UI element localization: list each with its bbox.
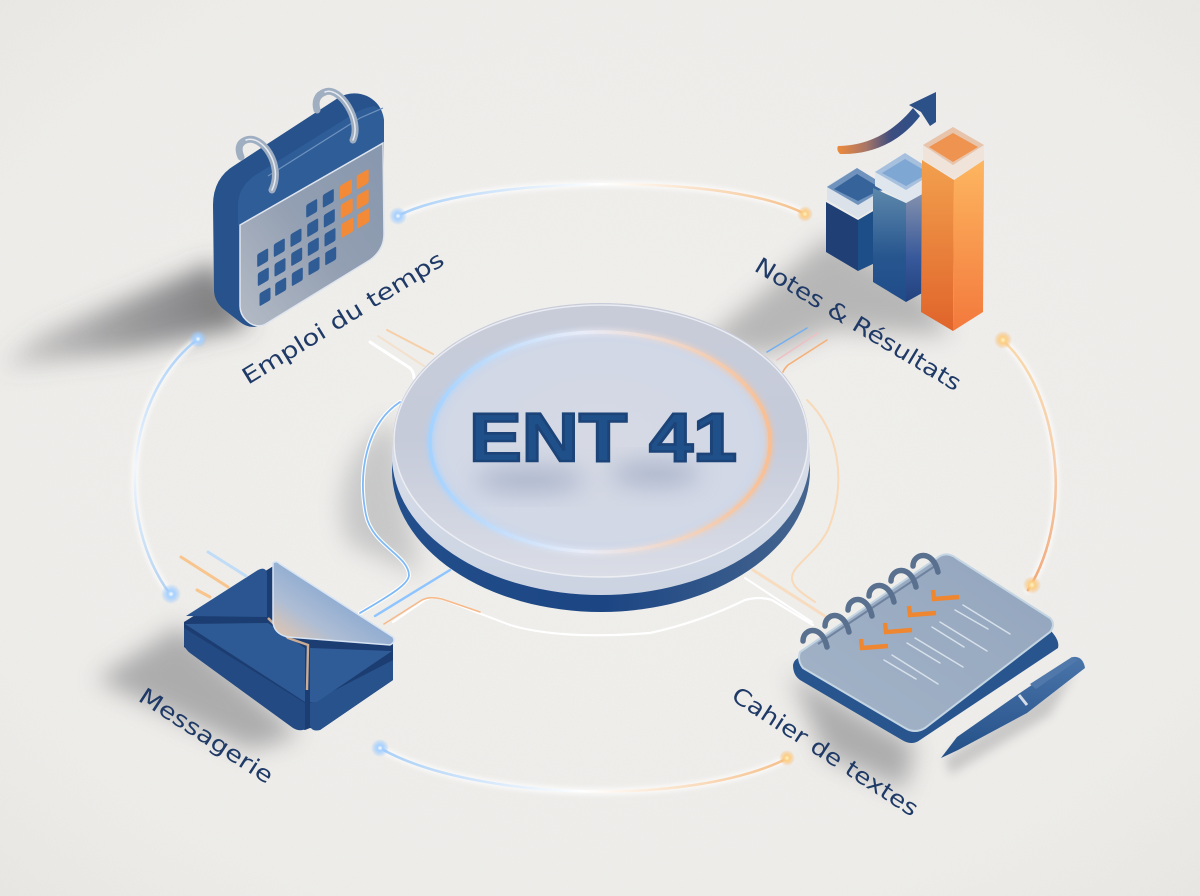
notebook glass page [799,554,1053,731]
envelope glass flap [273,562,394,645]
notebook text lines [884,605,1010,684]
icon: envelope [181,552,394,730]
disc top surface [393,303,809,577]
envelope dark base [184,565,393,730]
arc: bottom [380,748,788,792]
disc navy base [392,328,810,612]
icon: notebook and pen [793,554,1085,758]
calendar header [238,106,384,226]
calendar blue cells [257,189,336,306]
notebook navy cover [793,630,1058,743]
blue bar [873,153,935,302]
pen [941,657,1085,758]
title shadow [475,462,700,492]
cast shadows [0,235,1075,790]
calendar rings [239,91,355,190]
envelope orange glow lines [181,552,246,597]
calendar body [213,93,384,327]
calendar orange cells [340,169,369,238]
orange bar [921,127,984,331]
icon: calendar [213,91,384,327]
notebook spine [818,566,935,644]
outer orbit arcs [135,184,1056,792]
growth arrow [837,92,936,154]
envelope right face [310,648,392,702]
arc: right [1002,340,1056,590]
label: Cahier de textes: Cahier de textes [727,682,923,822]
envelope main left face [185,623,305,702]
disc glass wall [392,317,810,595]
notebook spiral rings [803,555,938,647]
envelope left side [184,628,305,730]
calendar glass panel [240,143,384,326]
icon: bar chart with arrow [826,92,984,331]
label: Notes & Résultats: Notes & Résultats [750,253,966,397]
arc: top [398,184,805,216]
label: Emploi du temps: Emploi du temps [238,247,449,390]
navy bar [826,168,888,271]
arc: left [135,339,198,594]
circuit connectors [360,328,838,635]
central disc [392,303,810,612]
label: Messagerie: Messagerie [134,683,278,789]
arc end dots [161,206,1041,766]
arc halo [135,184,1056,792]
envelope right side [310,660,393,730]
title: ENT 41: ENT 41 [469,399,737,476]
notebook orange checks [861,590,959,648]
envelope centre glow [268,618,308,690]
disc glowing ring [430,332,770,552]
labels [134,247,966,822]
envelope top left triangle [186,569,267,617]
